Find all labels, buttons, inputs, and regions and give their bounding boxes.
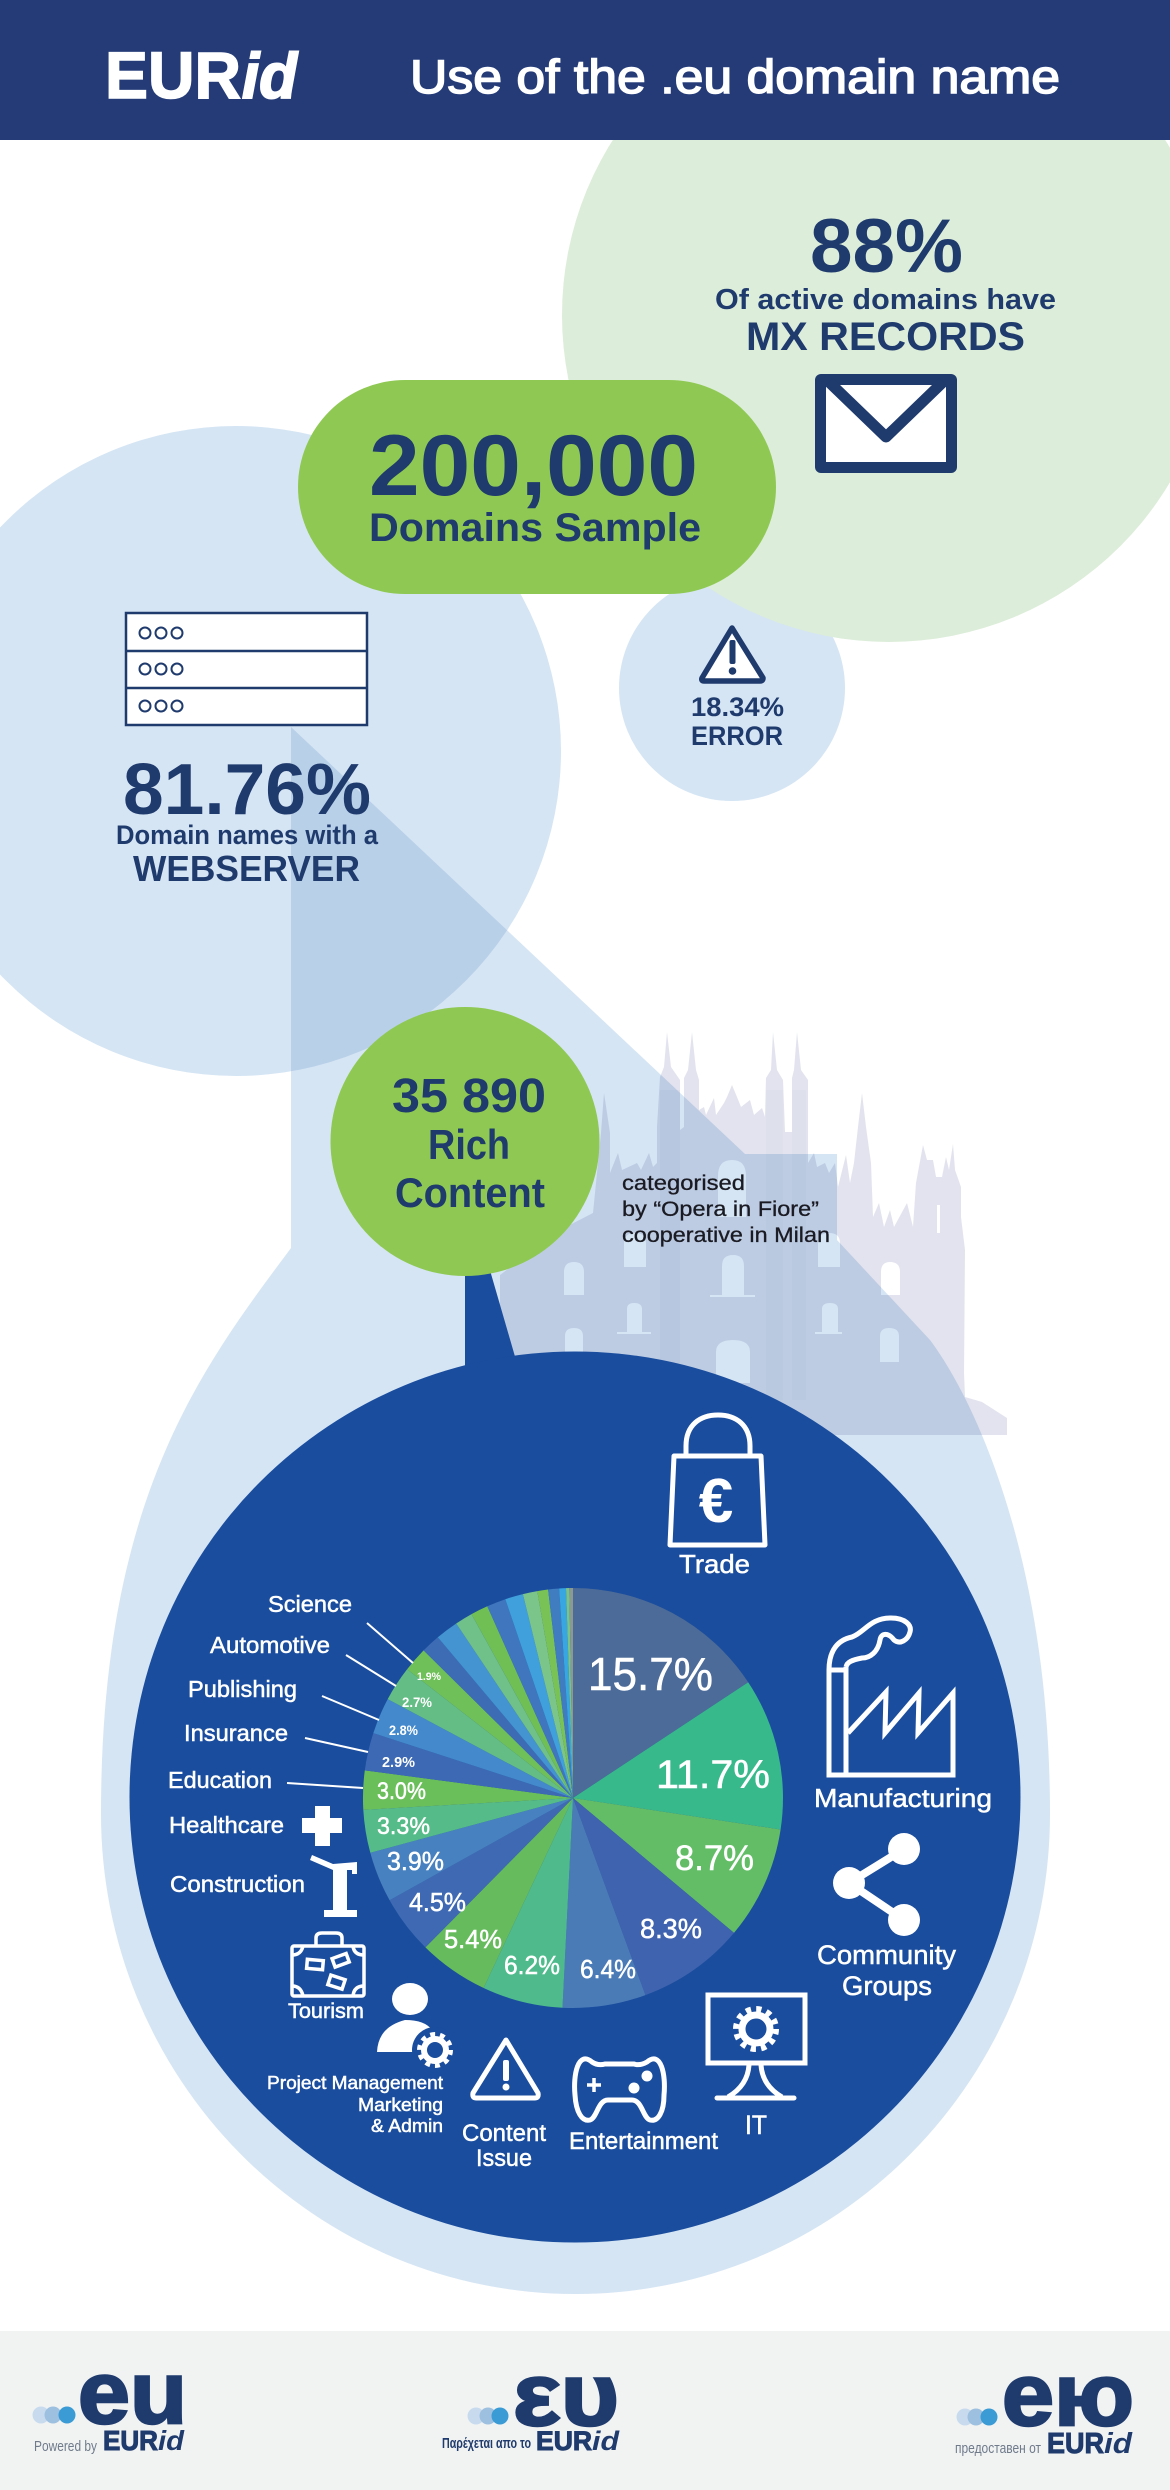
funnel and webserver circle overlap — [291, 727, 507, 1072]
circle: error background — [619, 575, 845, 801]
callout: 35 890 rich content: Content — [395, 1169, 545, 1216]
leader labels: left categories: Publishing — [188, 1676, 297, 1702]
label: Tourism: Tourism — [288, 2000, 364, 2023]
label: Content Issue: Content — [462, 2120, 546, 2147]
label: Content Issue: Issue — [476, 2145, 532, 2172]
leader labels: left categories: Construction — [170, 1871, 305, 1897]
icon: web server — [126, 613, 367, 725]
logo: EURid: EUR — [105, 38, 241, 112]
leader labels: left categories: Healthcare — [169, 1812, 284, 1838]
icon: community share — [833, 1833, 920, 1936]
logo: Cyrillic eu: ею — [1002, 2345, 1134, 2444]
stat: 81.76% webserver: WEBSERVER — [133, 848, 360, 889]
logo: .eu powered by EURid: EUR — [103, 2425, 158, 2456]
stat: 81.76% webserver: Domain names with a — [116, 820, 379, 850]
circle: webserver background — [0, 426, 561, 1076]
icon: project management person and gear — [377, 1983, 458, 2073]
icon: envelope — [815, 374, 957, 473]
icon: tourism suitcase — [292, 1933, 364, 1996]
icon: warning triangle — [702, 628, 763, 681]
label: Entertainment: Entertainment — [569, 2128, 718, 2155]
logo: .eu powered by EURid: eu — [78, 2343, 187, 2442]
callout: 35 890 rich content: 35 890 — [392, 1070, 546, 1123]
pie value labels: 3.3% — [377, 1813, 430, 1840]
leader labels: left categories — [168, 1591, 413, 1897]
note: categorised by Opera in Fiore — [622, 1172, 830, 1247]
label: Content Issue — [462, 2120, 546, 2172]
icon: manufacturing factory — [829, 1618, 953, 1775]
icon: healthcare cross — [302, 1806, 342, 1846]
label: Project Management Marketing and Admin: Marketing — [358, 2095, 443, 2115]
logo: Greek eu: id — [592, 2426, 620, 2456]
stat: 18.34% error: ERROR — [691, 721, 783, 751]
header bar — [0, 0, 1170, 140]
icon: trade shopping bag: € — [699, 1467, 733, 1536]
stat: 18.34% error — [691, 692, 784, 751]
footer bar — [0, 2331, 1170, 2490]
logo: Greek eu: ευ — [513, 2345, 619, 2444]
silhouette: Milan cathedral — [500, 1032, 1007, 1435]
leader labels: left categories: Education — [168, 1767, 272, 1793]
icon: content issue warning — [473, 2040, 538, 2098]
bottle-shaped funnel background — [101, 727, 1050, 2294]
logo: Cyrillic eu: id — [1104, 2428, 1133, 2460]
pie value labels: 4.5% — [409, 1887, 466, 1917]
pie value labels: 5.4% — [444, 1924, 502, 1954]
label: Community Groups: Groups — [842, 1971, 932, 2001]
logo: Cyrillic eu: EUR — [1047, 2428, 1104, 2460]
label: Community Groups — [817, 1940, 957, 2001]
stat: 81.76% webserver — [116, 750, 379, 889]
note: categorised by Opera in Fiore: by “Opera in Fiore” — [622, 1198, 819, 1221]
stat: 18.34% error: 18.34% — [691, 692, 784, 722]
logo: .eu powered by EURid: Powered by — [34, 2438, 97, 2455]
leader labels: left categories: Insurance — [184, 1720, 288, 1746]
pie value labels: 15.7% — [588, 1648, 713, 1700]
label: Community Groups: Community — [817, 1940, 957, 1970]
logo: Greek eu — [442, 2345, 620, 2456]
callout: 200,000 domains sample — [298, 380, 776, 594]
stat: 88% MX records: Of active domains have — [715, 284, 1056, 316]
stat: 81.76% webserver: 81.76% — [123, 750, 371, 830]
logo: EURid: id — [242, 40, 299, 112]
logo: Cyrillic eu: предоставен от — [955, 2440, 1041, 2457]
note: categorised by Opera in Fiore: categorised — [622, 1172, 745, 1195]
stat: 88% MX records — [715, 204, 1056, 359]
stat: 88% MX records: MX RECORDS — [746, 315, 1025, 359]
pie value labels — [377, 1648, 770, 1984]
leader labels: left categories: Automotive — [210, 1632, 330, 1658]
logo: Greek eu: Παρέχεται απο το — [442, 2435, 531, 2452]
note: categorised by Opera in Fiore: cooperative in Milan — [622, 1224, 830, 1247]
logo: Cyrillic eu — [955, 2345, 1134, 2460]
label: Project Management Marketing and Admin: Project Management — [267, 2073, 443, 2093]
pie value labels: 11.7% — [656, 1753, 770, 1797]
pie value labels: 2.7% — [402, 1694, 433, 1710]
leader labels: left categories: Science — [268, 1591, 352, 1617]
icon: construction crane — [310, 1855, 357, 1917]
pie value labels: 8.3% — [640, 1913, 702, 1944]
label: IT: IT — [745, 2110, 767, 2140]
callout: 200,000 domains sample: Domains Sample — [369, 506, 701, 550]
pie value labels: 6.2% — [504, 1950, 560, 1980]
stat: 88% MX records: 88% — [810, 204, 963, 289]
icon: entertainment gamepad — [575, 2059, 664, 2120]
pie value labels: 3.0% — [377, 1778, 426, 1805]
pie value labels: 3.9% — [387, 1846, 444, 1876]
pie value labels: 2.8% — [389, 1722, 418, 1738]
title: Use of the .eu domain name — [410, 50, 1060, 103]
icon: trade shopping bag — [670, 1415, 765, 1545]
pie chart: categories — [363, 1588, 783, 2008]
label: Trade: Trade — [679, 1549, 750, 1579]
logo: .eu powered by EURid: id — [158, 2425, 185, 2456]
pie value labels: 2.9% — [382, 1754, 415, 1771]
pie value labels: 1.9% — [417, 1671, 441, 1683]
callout: 200,000 domains sample: 200,000 — [369, 418, 698, 514]
pie value labels: 8.7% — [675, 1839, 754, 1878]
callout: 35 890 rich content — [330, 1007, 600, 1276]
label: Manufacturing: Manufacturing — [814, 1783, 992, 1813]
main dark circle with connector — [130, 1260, 1020, 2242]
logo: Greek eu: EUR — [536, 2426, 592, 2456]
logo: .eu powered by EURid — [32, 2343, 187, 2456]
circle: MX records background — [562, 0, 1170, 642]
label: Project Management Marketing and Admin: & Admin — [371, 2116, 443, 2136]
label: Project Management Marketing and Admin — [267, 2073, 443, 2136]
pie value labels: 6.4% — [580, 1954, 636, 1984]
callout: 35 890 rich content: Rich — [428, 1121, 510, 1168]
icon: IT monitor and gear — [708, 1995, 805, 2098]
